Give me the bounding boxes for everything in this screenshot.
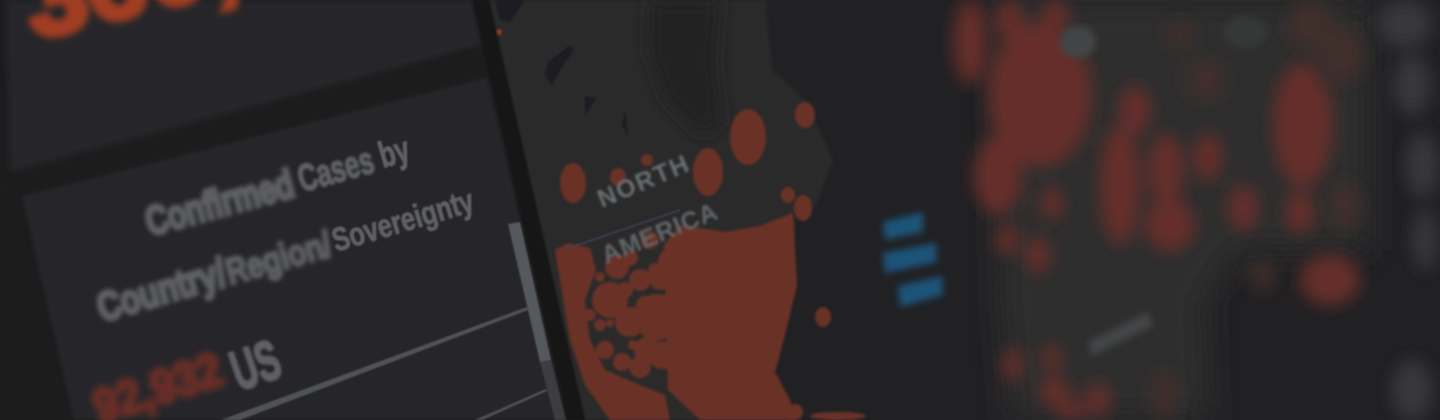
arctic islands [495,0,628,135]
heading line 1 [143,140,408,238]
right edge grey labels [1379,0,1438,420]
heading line 1: Confirmed [140,160,299,245]
heading line 2: Sovereignty [327,182,478,259]
blue ocean label [883,212,943,307]
country label: US [222,327,288,402]
red outbreak mass: USA [555,213,797,420]
land: north america [489,0,833,420]
heading line 1: by [374,128,414,176]
row divider [221,307,528,420]
red outbreak mass: europe and middle east [953,0,1360,420]
row divider lower [475,389,547,420]
border line above america [566,210,680,249]
heading line 1: Cases [293,140,379,201]
divider: dark gap between panel and map [472,0,585,420]
heading line 2 [94,193,472,324]
land: europe and africa, blurred [995,0,1370,420]
circles: northern outbreaks [560,102,866,420]
map label: america: AMERICA [598,198,721,270]
panel: map [489,0,1440,420]
dark bay [656,4,715,124]
red dot at map edge [496,29,502,35]
heading line 2: Country/ [91,249,231,331]
panel: confirmed cases list [22,77,567,420]
scrollbar [508,222,566,420]
faint red scatter [1151,0,1364,420]
panel: top total counter [6,0,481,172]
grey blurred map labels [1060,16,1267,356]
map label: north: NORTH [593,150,693,214]
heading line 2: Region/ [221,224,336,293]
divider: dark gap between panels [0,46,488,198]
